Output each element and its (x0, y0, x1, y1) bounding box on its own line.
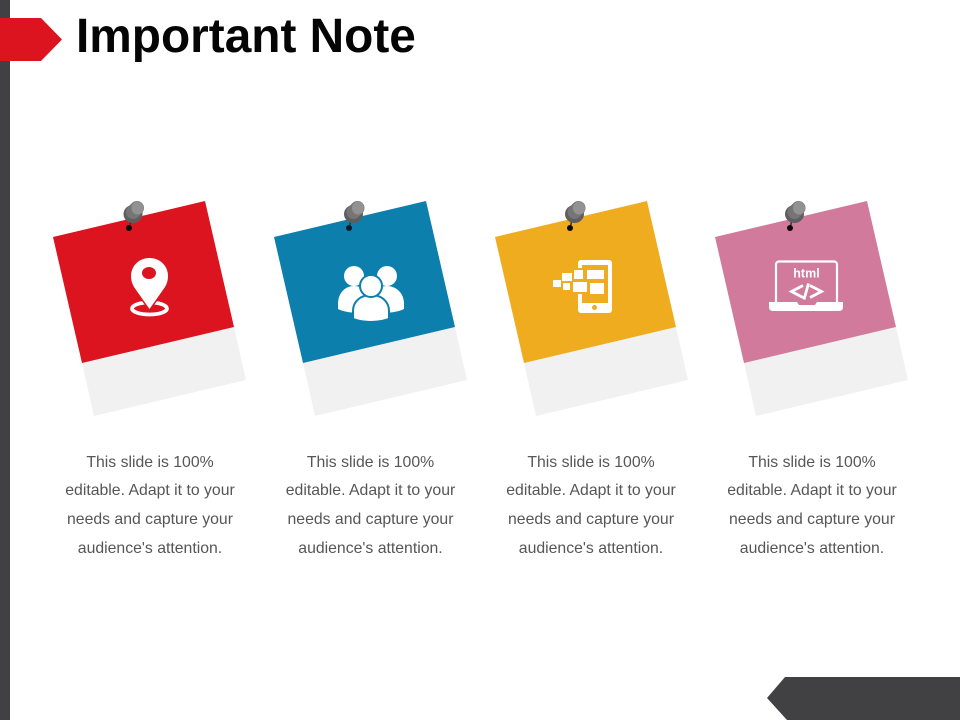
text block 4: audience's attention. (740, 540, 884, 557)
card 4 paper (744, 327, 908, 416)
text block 3 (506, 454, 676, 557)
card 2 paper (303, 327, 467, 416)
text block 2 (286, 454, 455, 557)
icon: location pin (131, 258, 168, 314)
icon: laptop with html code (769, 262, 843, 311)
card 3 paper (524, 327, 688, 416)
card 1 colour panel (53, 201, 234, 363)
text block 2: editable. Adapt it to your (286, 482, 455, 499)
text block 2: needs and capture your (288, 511, 453, 528)
text block 3: audience's attention. (519, 540, 663, 557)
text block 4 (727, 454, 897, 557)
push pin 2 (344, 202, 364, 231)
title: Important Note (76, 10, 416, 63)
card 2 colour panel (274, 201, 455, 363)
text block 1: editable. Adapt it to your (65, 482, 235, 499)
text block 1: This slide is 100% (86, 454, 214, 471)
card 1 paper (82, 327, 246, 416)
card 4 colour panel (715, 201, 896, 363)
note card 1: location (53, 201, 246, 416)
left sidebar bar (0, 0, 10, 720)
text block 3: needs and capture your (508, 511, 674, 528)
text block 4: needs and capture your (729, 511, 895, 528)
note card 2: team (274, 201, 467, 416)
text block 4: This slide is 100% (748, 454, 876, 471)
push pin 3 (565, 202, 585, 231)
icon: phone with data blocks (553, 260, 612, 313)
push pin 1 (124, 202, 144, 231)
text block 3: editable. Adapt it to your (506, 482, 676, 499)
text block 2: audience's attention. (298, 540, 443, 557)
text block 2: This slide is 100% (307, 454, 434, 471)
footer tab (767, 677, 960, 720)
text block 1: audience's attention. (78, 540, 222, 557)
text block 4: editable. Adapt it to your (727, 482, 897, 499)
note card 3: mobile data (495, 201, 688, 416)
red title arrow (0, 18, 62, 61)
card 3 colour panel (495, 201, 676, 363)
text block 1: needs and capture your (67, 511, 233, 528)
icon: group of people (338, 266, 404, 322)
push pin 4 (785, 202, 805, 231)
text block 1 (65, 454, 235, 557)
icon: laptop with html code: html (793, 266, 820, 280)
note card 4: html laptop (715, 201, 908, 416)
text block 3: This slide is 100% (527, 454, 655, 471)
